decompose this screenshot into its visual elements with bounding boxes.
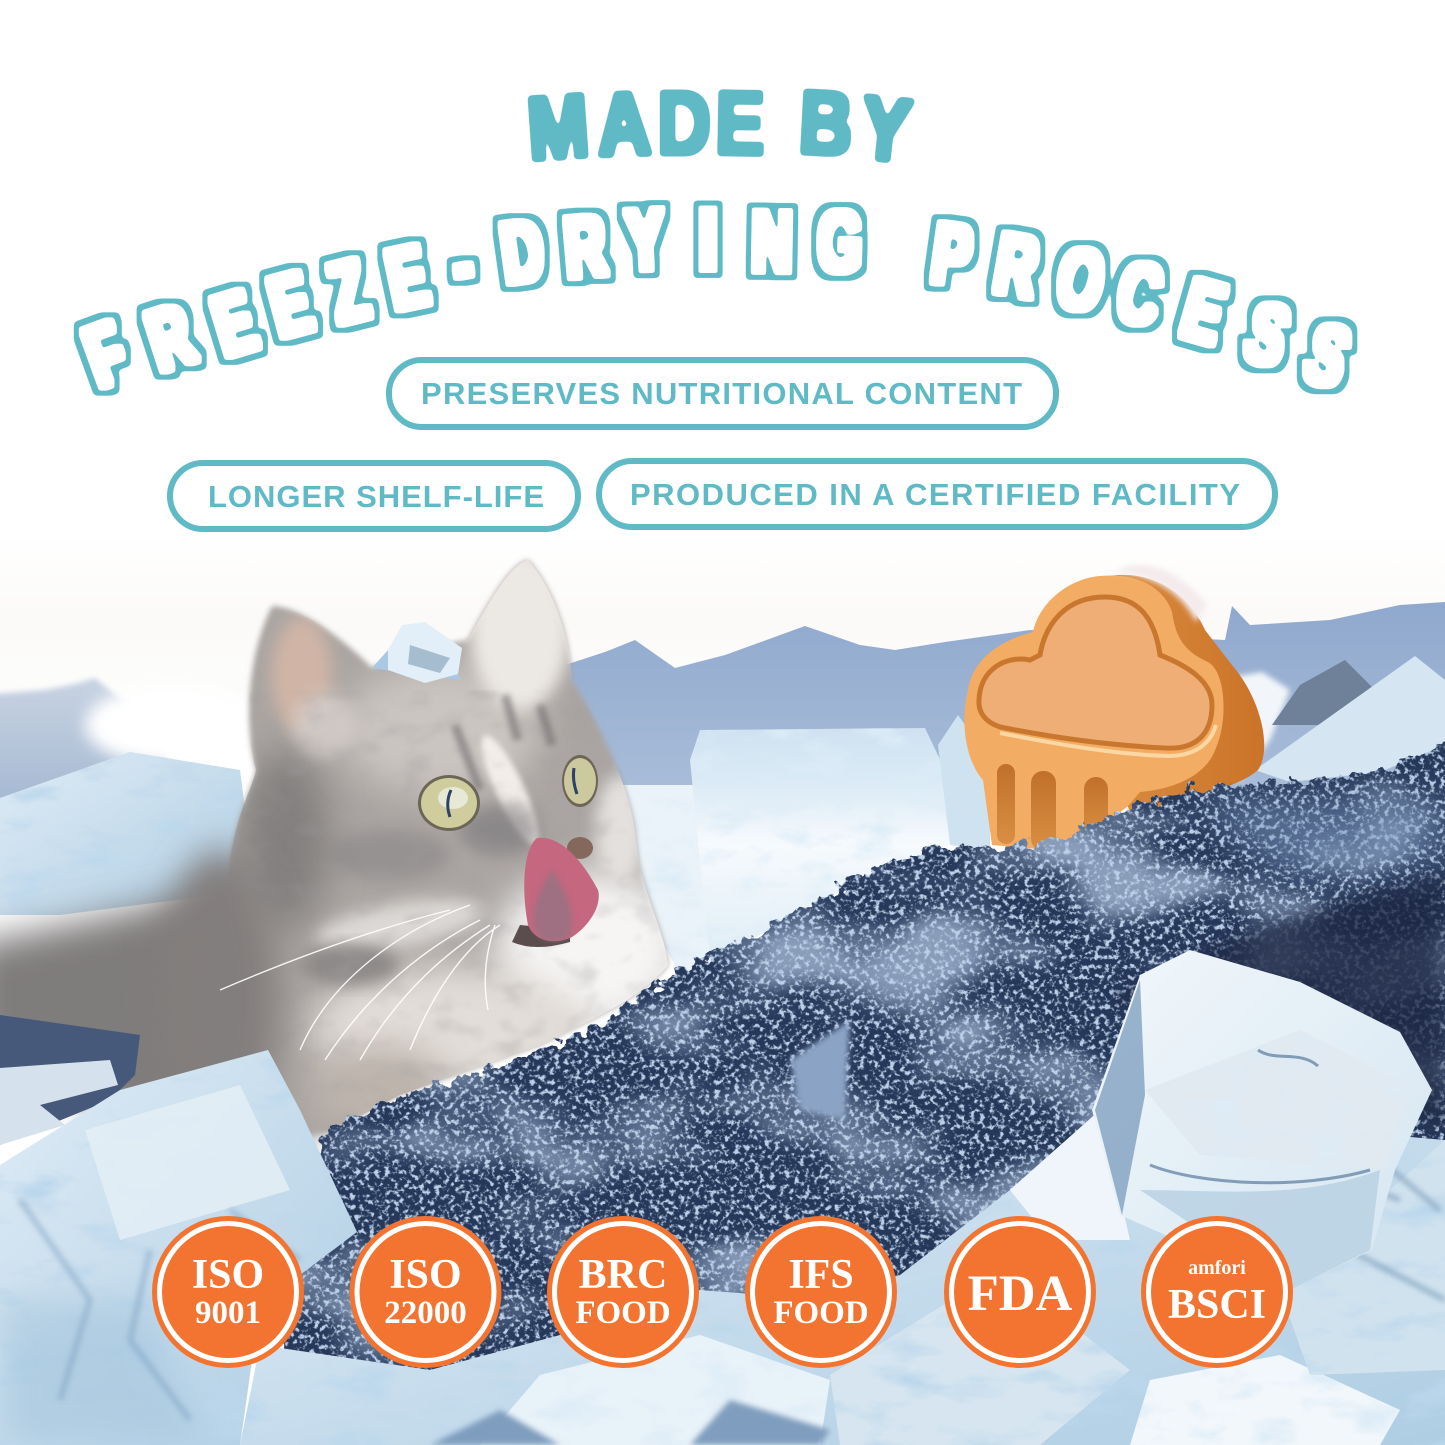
ice: bright rubble highlights	[430, 1110, 1445, 1445]
badge: amfori BSCI: amfori	[1188, 1257, 1246, 1279]
title: freeze-drying process: E	[1172, 261, 1235, 363]
badge: BRC Food: FOOD	[575, 1295, 671, 1331]
cat whiskers	[220, 905, 500, 1060]
title: freeze-drying process: S	[1235, 284, 1300, 386]
badge: ISO 22000	[350, 1216, 502, 1368]
title: freeze-drying process: E	[260, 254, 321, 356]
snow cloud over left mountains	[85, 685, 255, 765]
pill: longer shelf-life: LONGER SHELF-LIFE	[208, 479, 544, 514]
dark rocks under cat left	[0, 1015, 140, 1145]
distant mountains: right	[565, 602, 1445, 800]
title: freeze-drying process: F	[73, 304, 138, 406]
badge: ISO 9001: ISO	[192, 1252, 264, 1298]
cat right eye	[562, 755, 598, 807]
badge: FDA: FDA	[968, 1266, 1073, 1322]
title: made by: M	[524, 76, 592, 180]
ice block: behind treat	[938, 715, 990, 850]
ice block: right background	[1255, 656, 1445, 782]
cat tongue shading	[534, 870, 572, 941]
treat: cloud-shaped orange biscuit	[964, 565, 1264, 852]
cat	[0, 550, 685, 1160]
cat mouth	[512, 925, 570, 947]
title: made by: E	[714, 74, 765, 174]
badge: ISO 22000: ISO	[389, 1252, 462, 1298]
title: freeze-drying process: G	[816, 194, 864, 291]
pill: preserves nutritional content: PRESERVES NUTRITIONAL CONTENT	[421, 376, 1022, 411]
badge: IFS Food: IFS	[788, 1252, 854, 1298]
pill: produced in a certified facility	[599, 461, 1275, 527]
dark speckled mountain	[284, 741, 1445, 1370]
ice field: left	[0, 752, 255, 915]
cat neck seam blend	[160, 850, 280, 1150]
badge: IFS Food: FOOD	[773, 1295, 869, 1331]
cat tongue	[524, 838, 599, 941]
title: made by: D	[657, 74, 711, 174]
title: made by: Y	[856, 78, 915, 182]
title: made by	[524, 73, 915, 182]
badge: BRC Food	[547, 1216, 699, 1368]
cat head base	[200, 560, 668, 1150]
small ice cube on cat head	[372, 622, 462, 683]
certification badges	[152, 1216, 1293, 1368]
title: freeze-drying process: E	[203, 273, 267, 375]
treat slots	[997, 764, 1108, 851]
badge: BRC Food: BRC	[579, 1252, 667, 1298]
ice block: centre	[690, 728, 950, 960]
badge: FDA	[944, 1216, 1096, 1368]
title: made by: A	[596, 74, 652, 176]
title: freeze-drying process: R	[136, 286, 205, 390]
title: made by: B	[797, 73, 855, 175]
distant mountains: left	[0, 678, 170, 810]
treat face	[964, 575, 1224, 852]
snow patch right background	[1210, 672, 1290, 780]
title: freeze-drying process: Z	[320, 241, 377, 343]
cat fur shading	[230, 560, 668, 1126]
badge: ISO 22000: 22000	[384, 1295, 467, 1331]
title: freeze-drying process: -	[445, 215, 480, 313]
badge: ISO 9001	[152, 1216, 304, 1368]
ice cube: bottom right	[1092, 950, 1432, 1290]
title: freeze-drying process: I	[697, 192, 719, 288]
ice cube: left highlight	[85, 1085, 290, 1240]
badge: IFS Food	[745, 1216, 897, 1368]
title: freeze-drying process: Y	[624, 191, 667, 289]
ice cube: bottom left	[0, 1050, 357, 1445]
title: freeze-drying process	[73, 191, 1361, 407]
title: freeze-drying process: E	[379, 227, 436, 329]
title: freeze-drying process: R	[988, 215, 1045, 317]
treat side	[1100, 575, 1264, 812]
cat body	[0, 875, 330, 1160]
title: freeze-drying process: P	[926, 205, 977, 305]
ice: small slab left	[0, 1060, 118, 1145]
treat recess highlight	[1000, 725, 1216, 756]
treat recess	[979, 597, 1212, 748]
title: freeze-drying process: S	[1293, 305, 1361, 407]
pill: longer shelf-life	[170, 463, 578, 529]
ice: bottom rubble band	[240, 1110, 1445, 1445]
ice cube: left shadow	[0, 1300, 200, 1445]
badge: amfori BSCI: BSCI	[1168, 1282, 1266, 1328]
treat snow	[1115, 565, 1207, 622]
cat left eye	[418, 775, 480, 831]
pill: preserves nutritional content	[389, 360, 1056, 427]
title: freeze-drying process: R	[561, 198, 610, 296]
badge: ISO 9001: 9001	[195, 1295, 261, 1331]
cat nose	[567, 837, 593, 859]
title: freeze-drying process: O	[1049, 229, 1112, 331]
title: freeze-drying process: C	[1108, 243, 1171, 345]
title: freeze-drying process: D	[495, 202, 549, 302]
snowy sky haze	[0, 535, 1445, 705]
badge: amfori BSCI	[1141, 1216, 1293, 1368]
pill: produced in a certified facility: PRODUCED IN A CERTIFIED FACILITY	[630, 477, 1240, 512]
ice cracks: left cube	[20, 1200, 300, 1420]
title: freeze-drying process: N	[751, 194, 793, 290]
rock peak, right background	[1272, 660, 1380, 725]
ice field: middle behind cat	[620, 785, 730, 975]
